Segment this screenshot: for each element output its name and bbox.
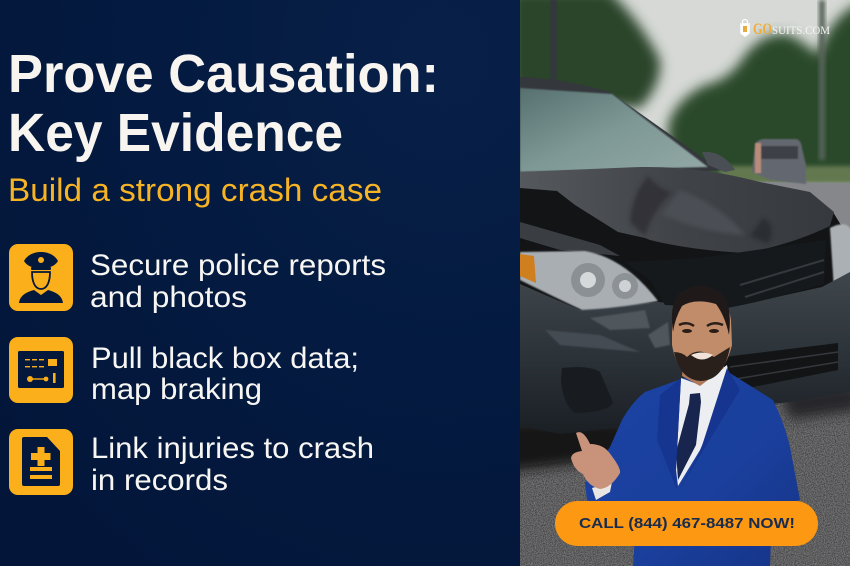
- title: [8, 44, 439, 163]
- lower grille and fog lamp: [561, 343, 838, 413]
- neck: [682, 366, 724, 386]
- call to action button: CALL (844) 467-8487 NOW!: [579, 515, 795, 532]
- upper grille: [664, 248, 824, 308]
- crumpled hood: [520, 167, 834, 253]
- left trim under hood: [520, 222, 620, 256]
- text: police reports: [90, 249, 386, 314]
- logo: GoSuits.com: GO: [753, 21, 772, 38]
- text: injury records: [91, 432, 374, 497]
- text: police reports: and photos: [90, 281, 247, 314]
- text: injury records: in records: [91, 464, 228, 497]
- icon: lock: [741, 24, 749, 36]
- hair: [672, 286, 730, 335]
- text: police reports: Secure police reports: [90, 249, 386, 282]
- text: black box data: Pull black box data;: [91, 342, 359, 375]
- text: injury records: Link injuries to crash: [91, 432, 374, 465]
- tie: [676, 393, 701, 480]
- beard: [674, 347, 730, 381]
- face: [672, 301, 732, 366]
- lapel: [657, 368, 740, 492]
- icon: medical record: [9, 429, 73, 495]
- white shirt: [676, 365, 730, 486]
- evidence item: police reports: [9, 244, 386, 314]
- panel: crash photo: [505, 0, 850, 566]
- text: black box data: map braking: [91, 373, 262, 406]
- asphalt road: [520, 392, 850, 566]
- logo: GoSuits.com: [741, 20, 830, 38]
- title: Prove Causation:: [8, 44, 439, 104]
- sky and distant scene: [510, 0, 850, 245]
- attorney figure: [571, 286, 800, 566]
- bumper: [520, 272, 850, 434]
- evidence item: black box data: [9, 337, 359, 406]
- logo: GoSuits.com: SUITS.COM: [772, 23, 830, 37]
- eyes and brows: [679, 323, 723, 333]
- car roof and windshield: [520, 77, 735, 172]
- bumper damage highlights: [545, 310, 670, 352]
- icon: police officer: [9, 244, 73, 311]
- smile: [691, 352, 713, 360]
- pointing hand: [571, 432, 620, 489]
- text: black box data: [91, 342, 359, 406]
- subtitle: Build a strong crash case: [8, 172, 382, 208]
- shirt cuff: [592, 482, 612, 500]
- icon: black box recorder: [9, 337, 73, 403]
- distant car: [752, 139, 806, 184]
- suit: [585, 370, 800, 566]
- title: Key Evidence: [8, 103, 343, 163]
- evidence item: injury records: [9, 429, 374, 497]
- engine cavity and grille shadow: [520, 188, 841, 310]
- call to action button: [555, 501, 818, 546]
- right headlight: [830, 224, 850, 290]
- left headlight: [520, 251, 658, 310]
- panel: navy background: [0, 0, 520, 566]
